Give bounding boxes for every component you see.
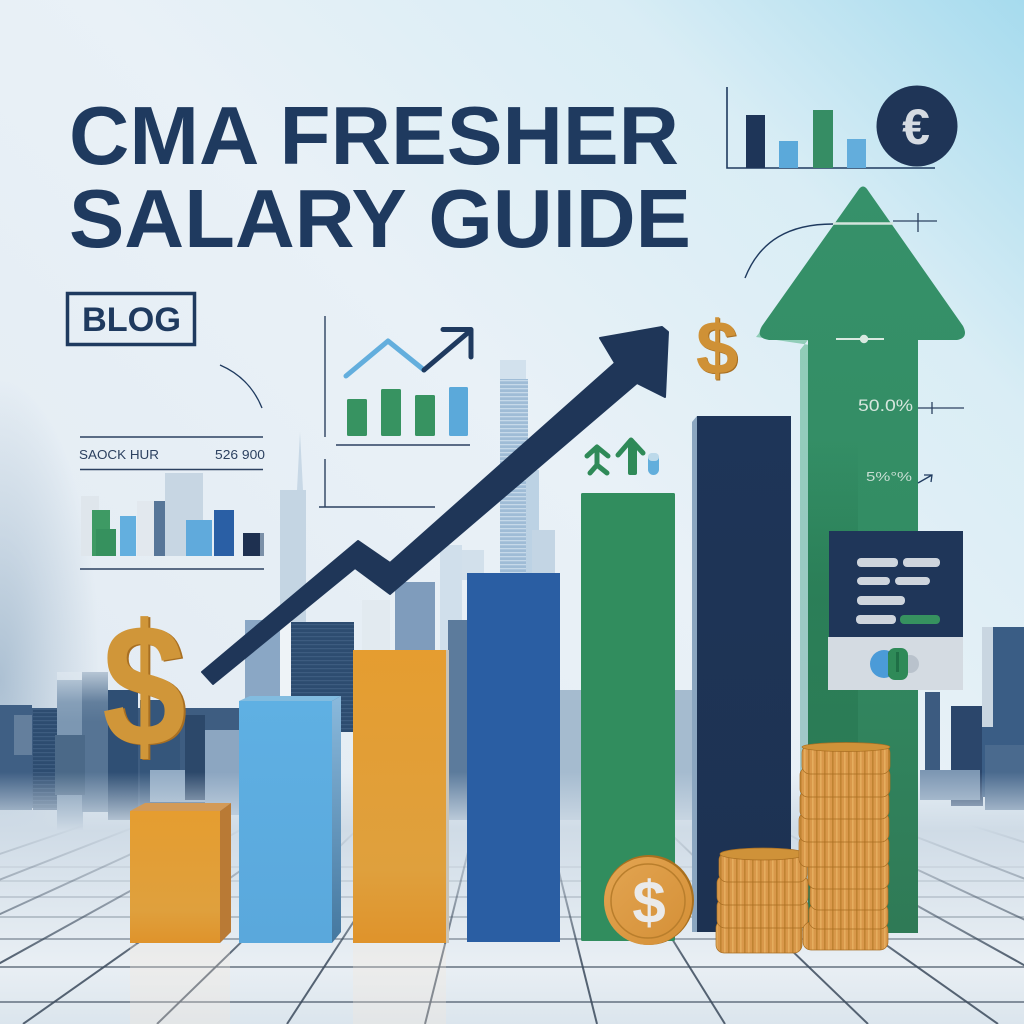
decorative arc left	[220, 365, 262, 408]
bar 1: orange short	[130, 803, 231, 943]
title: CMA FRESHER	[69, 89, 679, 182]
dollar sign large: $	[104, 588, 188, 785]
bar 3: orange tall	[353, 650, 449, 943]
coin with dollar: $	[632, 869, 666, 936]
title	[69, 89, 691, 265]
top-right mini chart	[727, 87, 935, 168]
rising navy trend arrow	[202, 327, 668, 684]
dollar sign small: $	[696, 306, 738, 391]
skyline fog fading into floor	[0, 772, 1024, 831]
coin with dollar	[604, 855, 694, 945]
icons: small green arrows and capsule	[587, 440, 659, 475]
bar 2: light blue	[239, 696, 341, 943]
coin stack short	[716, 848, 808, 953]
skyline fog over left cluster	[57, 672, 108, 722]
icon: euro coin	[876, 86, 958, 166]
blog badge	[68, 294, 194, 344]
dollar sign large: $	[102, 587, 186, 784]
center mini chart	[319, 316, 471, 507]
dollar sign small: $	[697, 307, 739, 392]
icon: euro coin: €	[902, 99, 930, 155]
left mini chart: stock table	[79, 437, 265, 569]
bar 6: navy	[692, 416, 791, 932]
bar 5: green	[581, 493, 675, 941]
info panel	[828, 531, 963, 690]
left edge haze	[0, 380, 100, 980]
left mini chart: stock table: SAOCK HUR	[79, 447, 159, 462]
city skyline	[0, 360, 1024, 830]
big green arrow: 50.0%	[858, 397, 913, 415]
title: SALARY GUIDE	[69, 172, 691, 265]
tiled floor	[0, 680, 1024, 1024]
big green arrow: 5%°%	[866, 469, 913, 484]
bar 4: blue	[467, 573, 560, 942]
blog badge: BLOG	[82, 301, 181, 339]
left mini chart: stock table: 526 900	[215, 447, 265, 462]
coin stack tall	[799, 742, 890, 950]
big green arrow	[745, 186, 965, 933]
